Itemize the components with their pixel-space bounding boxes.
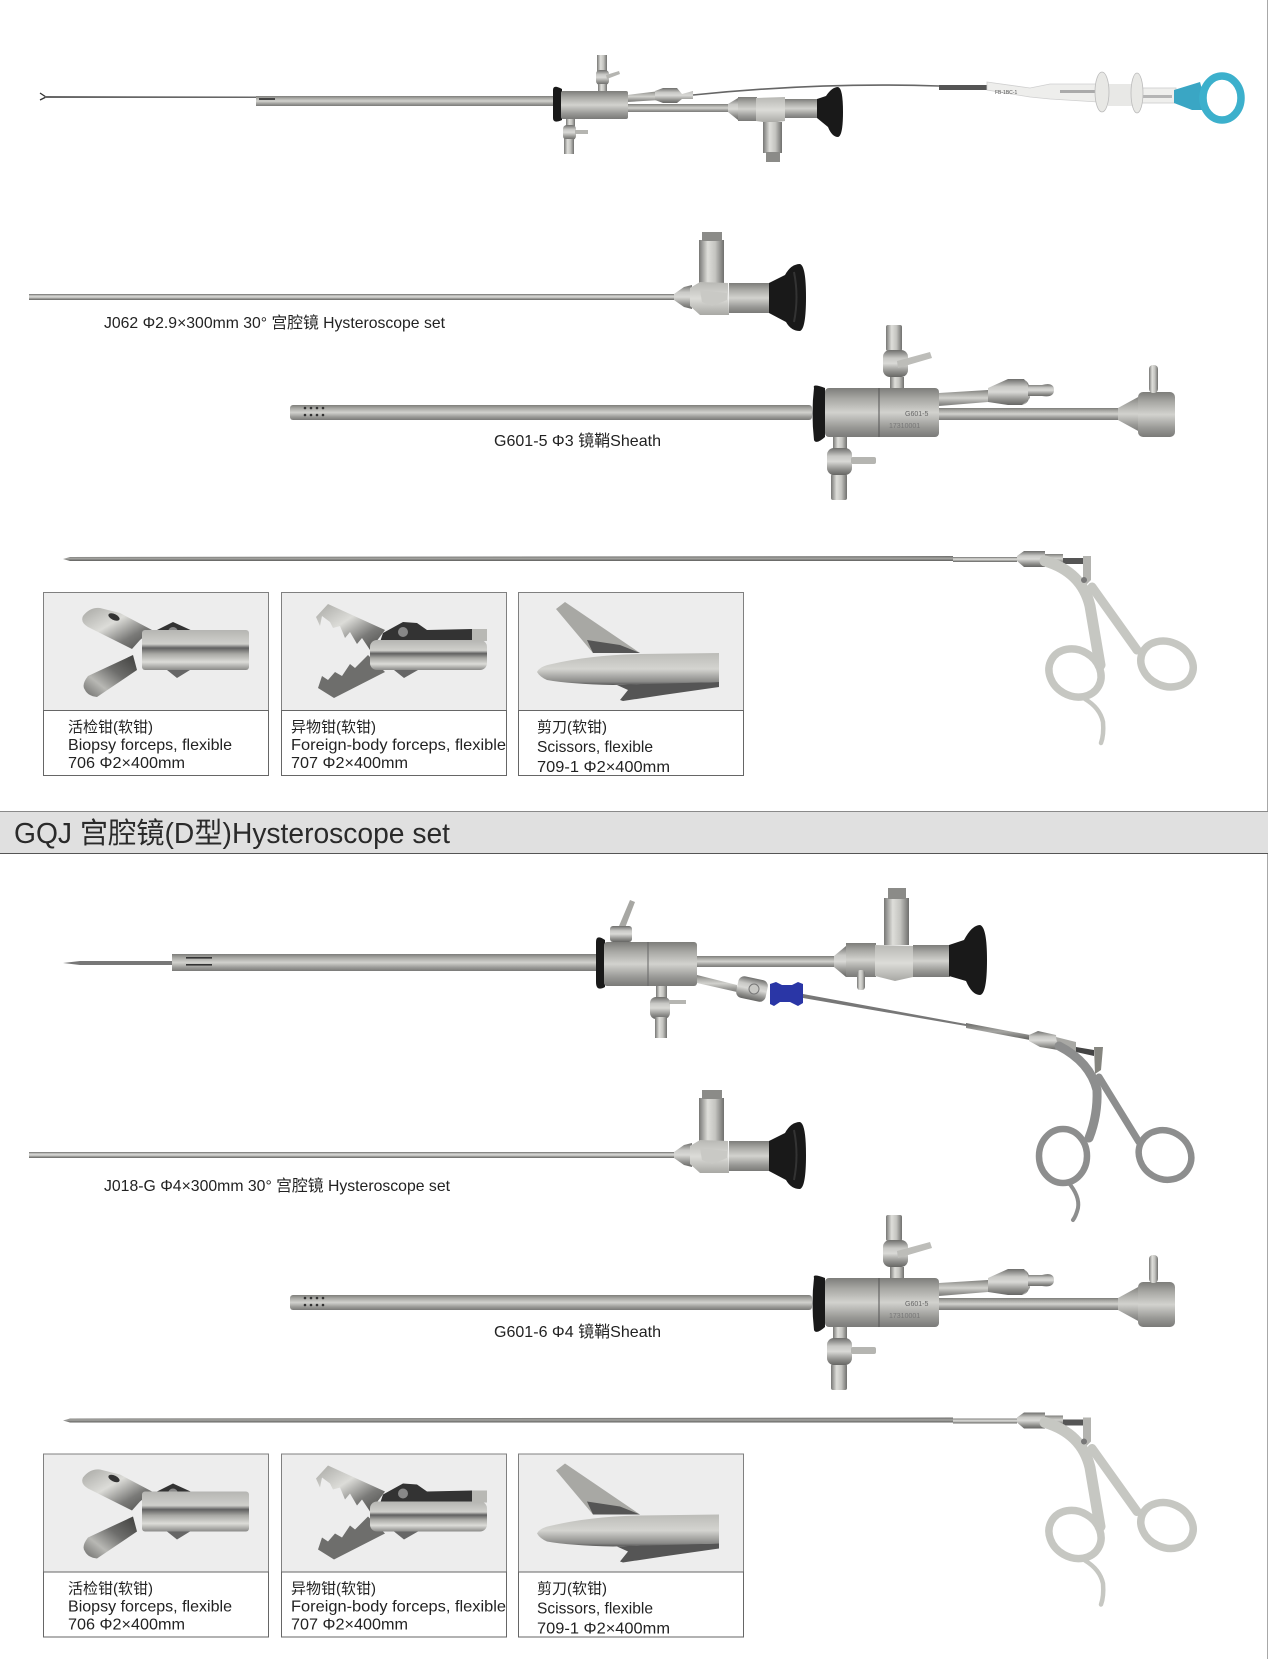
caption: G601-6 sheath: G601-6 Φ4 镜鞘Sheath [494,1322,661,1341]
card text: biopsy forceps: Biopsy forceps, flexible [68,737,232,754]
card text: foreign-body forceps: 707 Φ2×400mm [291,755,408,772]
card text: foreign-body forceps: Foreign-body forceps, flexible [291,1598,506,1616]
heading text: GQJ 宫腔镜(D型)Hysteroscope set [14,817,450,850]
forceps wire [803,994,966,1026]
card text: biopsy forceps [68,719,232,772]
forceps wire tip [40,93,257,100]
forceps handles [1039,1046,1200,1220]
scope tube [697,956,835,967]
instrument: hysteroscope J018-G [29,1090,806,1189]
close-up: foreign-body jaws [316,604,487,698]
instrument: sheath G601-5 [290,325,1175,500]
outer sheath tube [256,96,556,106]
panel: scissors [518,592,744,776]
card text: biopsy forceps: 活检钳(软钳) [68,1580,153,1598]
top lever valve [610,900,635,942]
card text: foreign-body forceps [291,1580,506,1634]
card text: scissors: 剪刀(软钳) [537,1580,607,1598]
card text: foreign-body forceps [291,719,506,772]
caption: J062 hysteroscope: J062 Φ2.9×300mm 30° 宫腔镜 Hysteroscope set [104,313,446,332]
panel: foreign-body forceps [282,592,506,776]
sheath ball valve [655,88,693,103]
card text: biopsy forceps: 活检钳(软钳) [68,719,153,736]
caption: G601-5 sheath: G601-5 Φ3 镜鞘Sheath [494,431,661,450]
side tube and joint [697,975,769,1003]
scope eyepiece [949,925,987,995]
card text: biopsy forceps: 706 Φ2×400mm [68,1616,185,1634]
white plastic handle: FB-1BC-1 [995,90,1017,96]
panel: scissors (lower) [518,1454,744,1638]
card text: scissors: 709-1 Φ2×400mm [537,1620,670,1638]
instrument: assembled D-type hysteroscope with forceps [63,888,1200,1220]
card text: scissors: 剪刀(软钳) [537,719,607,736]
inner forceps tip [63,961,172,965]
card text: scissors [537,719,670,776]
card text: biopsy forceps: 706 Φ2×400mm [68,755,185,772]
instrument: forceps handle and shaft (lower) [63,1412,1201,1604]
instrument: sheath G601-6 [290,1215,1175,1390]
instrument: hysteroscope J062 [29,232,806,331]
close-up: biopsy jaws [82,608,249,697]
flexible forceps wire [693,85,939,95]
bottom stopcock [650,985,686,1038]
scope body [728,97,818,162]
outer sheath [172,954,597,971]
teal ring grip [1174,76,1241,120]
white plastic handle [987,72,1176,113]
spring section [939,85,987,90]
close-up: scissors blades [537,1464,719,1562]
blue connector [770,982,803,1006]
card text: biopsy forceps: Biopsy forceps, flexible [68,1598,232,1616]
card text: foreign-body forceps: 707 Φ2×400mm [291,1616,408,1634]
instrument: assembled hysteroscope with biopsy forceps (top) [40,55,1241,162]
sheath connector tubes [627,91,729,112]
sheath body with black ring [596,937,697,989]
top stopcock [596,55,620,92]
close-up: foreign-body jaws [316,1466,487,1560]
close-up: scissors blades [537,602,719,701]
panel: foreign-body forceps (lower) [282,1454,506,1637]
card text: scissors: 709-1 Φ2×400mm [537,759,670,776]
card text: scissors: Scissors, flexible [537,739,653,756]
card text: scissors: Scissors, flexible [537,1600,653,1618]
card text: biopsy forceps [68,1580,232,1634]
panel: biopsy forceps [44,592,268,776]
sheath body with black ring [553,87,628,122]
card text: foreign-body forceps: 异物钳(软钳) [291,719,376,736]
instrument: forceps handle and shaft [63,551,1201,743]
forceps knurl and block [1029,1031,1103,1074]
caption: J018-G hysteroscope: J018-G Φ4×300mm 30° 宫腔镜 Hysteroscope set [104,1176,451,1195]
scope eyepiece [817,87,843,137]
card text: foreign-body forceps: Foreign-body forceps, flexible [291,737,506,754]
section heading band [0,811,1268,854]
card text: scissors [537,1580,670,1638]
close-up: biopsy jaws [82,1469,249,1558]
panel: biopsy forceps (lower) [44,1454,268,1637]
bottom stopcock [563,118,588,154]
scope body [834,888,950,990]
card text: foreign-body forceps: 异物钳(软钳) [291,1580,376,1598]
